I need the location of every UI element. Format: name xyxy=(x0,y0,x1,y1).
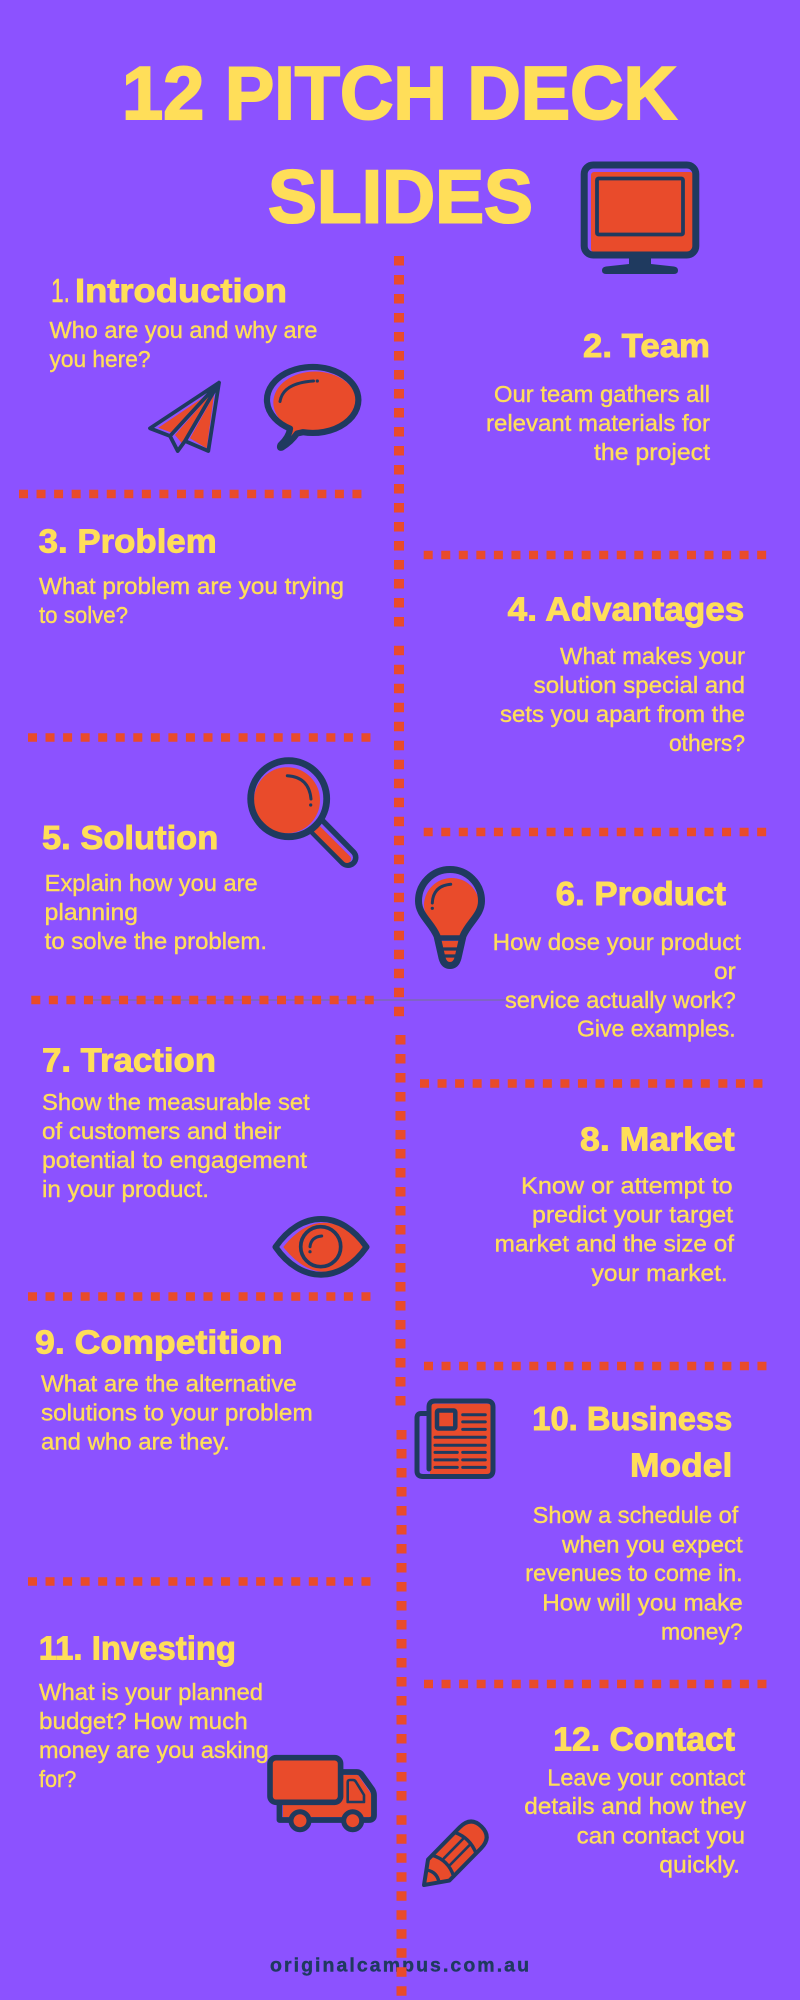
panel: 4. Advantages xyxy=(500,592,745,756)
text: advantages description: sets you apart from the xyxy=(500,701,745,727)
text: solution description xyxy=(45,870,267,954)
title: SLIDES xyxy=(268,154,533,238)
text: introduction description xyxy=(50,317,318,372)
text: business model description xyxy=(525,1502,743,1644)
heading: 12. Contact: 12. Contact xyxy=(553,1722,735,1758)
text: business model description: Show a schedule of xyxy=(533,1502,739,1528)
text: advantages description: What makes your xyxy=(560,643,745,669)
text: competition description: What are the alternative xyxy=(41,1371,297,1397)
panel: 6. Product xyxy=(493,876,742,1042)
text: contact description xyxy=(524,1764,747,1877)
text: competition description xyxy=(41,1371,313,1455)
heading: 8. Market: 8. Market xyxy=(580,1122,735,1159)
title xyxy=(122,51,677,238)
text: product description: or xyxy=(714,958,736,984)
text: introduction description: Who are you and why are xyxy=(50,317,318,343)
text: business model description: when you expect xyxy=(561,1531,743,1557)
text: investing description: for? xyxy=(39,1766,76,1792)
panel: 9. Competition xyxy=(35,1324,313,1455)
text: advantages description: others? xyxy=(669,730,745,756)
text: product description: How dose your product xyxy=(493,929,742,955)
heading: 3. Problem: 3. Problem xyxy=(39,524,217,561)
panel: 10. Business Model xyxy=(525,1401,743,1644)
text: business model description: money? xyxy=(661,1618,743,1644)
text: advantages description xyxy=(500,643,745,756)
text: solution description: Explain how you are xyxy=(45,870,258,896)
heading: 2. Team: 2. Team xyxy=(583,328,710,365)
icon: magnifying glass xyxy=(251,761,348,859)
text: traction description: Show the measurable set xyxy=(42,1089,310,1115)
panel: 3. Problem xyxy=(39,524,344,628)
icon: newspaper xyxy=(417,1401,493,1476)
heading: 5. Solution: 5. Solution xyxy=(42,820,218,857)
text: traction description: in your product. xyxy=(42,1176,209,1202)
icon: light bulb xyxy=(418,870,482,966)
text: business model description: revenues to come in. xyxy=(525,1560,743,1586)
heading: 4. Advantages: 4. Advantages xyxy=(508,592,744,629)
text: investing description xyxy=(39,1679,269,1792)
text: market description: market and the size of xyxy=(495,1231,735,1257)
text: investing description: budget? How much xyxy=(39,1708,248,1734)
text: team description: Our team gathers all xyxy=(494,381,710,407)
heading: 10. Business Model: 10. Business xyxy=(532,1401,732,1438)
panel: 8. Market xyxy=(495,1122,735,1286)
title: 12 PITCH DECK xyxy=(122,51,677,135)
heading: 11. Investing: 11. Investing xyxy=(39,1630,236,1667)
text: competition description: solutions to your problem xyxy=(41,1400,313,1426)
text: market description: Know or attempt to xyxy=(521,1173,733,1199)
text: contact description: can contact you xyxy=(577,1822,745,1848)
heading: 1. Introduction: 1. xyxy=(51,273,70,310)
text: business model description: How will you make xyxy=(542,1590,743,1616)
text: problem description: What problem are you trying xyxy=(39,573,344,599)
heading: 9. Competition: 9. Competition xyxy=(35,1324,283,1361)
text: solution description: to solve the problem. xyxy=(45,928,267,954)
icon: paper plane xyxy=(150,383,219,451)
text: problem description: to solve? xyxy=(39,602,128,628)
text: advantages description: solution special and xyxy=(534,672,745,698)
text: introduction description: you here? xyxy=(50,346,150,372)
panel: 2. Team xyxy=(486,328,711,465)
text: traction description: potential to engagement xyxy=(42,1147,308,1173)
text: market description: predict your target xyxy=(532,1202,734,1228)
text: investing description: What is your planned xyxy=(39,1679,263,1705)
text: product description: service actually work? xyxy=(505,987,736,1013)
heading: 6. Product: 6. Product xyxy=(556,876,726,913)
text: market description: your market. xyxy=(592,1260,728,1286)
text: contact description: quickly. xyxy=(659,1851,740,1877)
heading: 10. Business Model xyxy=(532,1401,732,1484)
text: team description xyxy=(486,381,711,465)
text: competition description: and who are they. xyxy=(41,1429,230,1455)
heading: 10. Business Model: Model xyxy=(630,1448,732,1484)
panel: 7. Traction xyxy=(42,1043,310,1202)
text: product description xyxy=(493,929,742,1042)
icon: monitor xyxy=(584,165,696,274)
panel: 1. Introduction xyxy=(50,273,318,372)
heading: 7. Traction: 7. Traction xyxy=(42,1043,216,1080)
text: traction description: of customers and their xyxy=(42,1118,281,1144)
panel: 12. Contact xyxy=(524,1722,747,1877)
text: market description xyxy=(495,1173,735,1286)
text: team description: relevant materials for xyxy=(486,410,710,436)
text: contact description: Leave your contact xyxy=(547,1764,746,1790)
text: contact description: details and how they xyxy=(524,1793,747,1819)
icon: pencil xyxy=(413,1816,492,1896)
text: solution description: planning xyxy=(45,899,138,925)
text: team description: the project xyxy=(594,439,711,465)
icon: eye xyxy=(276,1219,366,1275)
text: traction description xyxy=(42,1089,310,1202)
icon: speech bubble xyxy=(267,367,358,448)
heading: 1. Introduction: Introduction xyxy=(75,273,287,310)
footer: website: originalcampus.com.au xyxy=(270,1955,529,1977)
text: product description: Give examples. xyxy=(577,1016,736,1042)
panel: 11. Investing xyxy=(39,1630,269,1792)
text: investing description: money are you asking xyxy=(39,1737,269,1763)
panel: 5. Solution xyxy=(42,820,267,954)
icon: delivery truck xyxy=(270,1758,374,1830)
text: problem description xyxy=(39,573,344,628)
